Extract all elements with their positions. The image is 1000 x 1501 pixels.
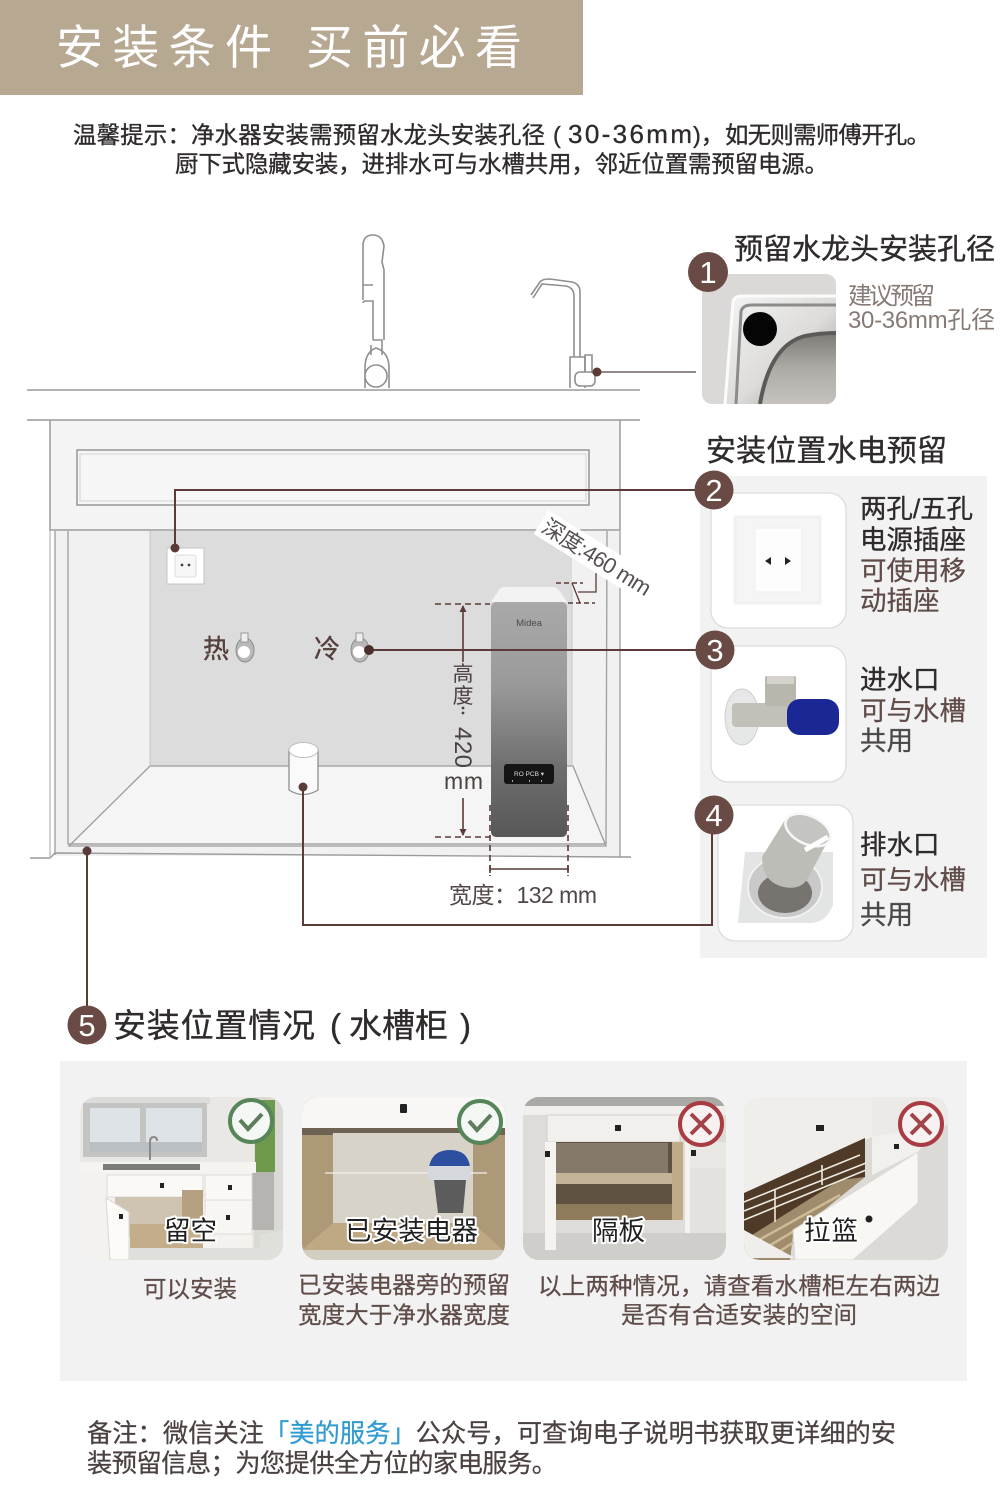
text: power socket: 两孔/五孔 (860, 494, 973, 524)
title banner: 买前必看 (306, 21, 522, 74)
photo: empty cabinet: 留空 (164, 1216, 217, 1246)
heading: cabinet situation (68, 1006, 471, 1044)
cold water valve: 冷 (314, 634, 340, 664)
heading: water and power: 安装位置水电预留 (706, 435, 947, 468)
cabinet fascia (50, 420, 620, 530)
photo: sink corner hole (702, 274, 836, 404)
text: floor drain: 排水口 (860, 830, 940, 860)
icon: check 1 (230, 1100, 272, 1142)
photo: shelf: 隔板 (592, 1216, 645, 1246)
callout line 1 (592, 368, 696, 376)
badge 1: 1 (699, 255, 717, 290)
panel: cabinet cases (60, 1061, 967, 1381)
heading: cabinet situation: ) (460, 1007, 471, 1044)
callout text: faucet hole (848, 283, 995, 334)
text: inlet valve: 可与水槽 (860, 696, 966, 726)
water purifier (491, 587, 567, 837)
depth dimension: 深度:460 mm (538, 514, 656, 601)
card: floor drain (718, 805, 853, 941)
caption: installed appliance: 已安装电器旁的预留 (298, 1272, 510, 1298)
photo: pull basket (744, 1097, 948, 1260)
heading: cabinet situation: ( (330, 1007, 341, 1044)
tip text (73, 119, 930, 177)
height dimension (435, 604, 490, 837)
icon: cross 2 (900, 1103, 942, 1145)
height dimension: 度 (452, 685, 474, 708)
badge 2: 2 (705, 473, 723, 508)
badge 4 (694, 796, 734, 834)
cold water valve (314, 633, 369, 664)
height dimension: mm (444, 768, 483, 794)
drain pipe (289, 742, 318, 794)
heading: faucet hole: 预留水龙头安装孔径 (734, 233, 995, 266)
card: inlet valve (711, 646, 846, 782)
card: power socket (711, 493, 846, 628)
callout line 3 (364, 645, 700, 655)
callout line 4 (298, 782, 712, 925)
width dimension (449, 805, 597, 908)
photo: shelf (523, 1097, 726, 1260)
text: power socket: 电源插座 (860, 525, 966, 555)
text: inlet valve: 共用 (860, 726, 913, 756)
tip text: 30-36mm (568, 119, 692, 149)
caption: shelf and basket: 以上两种情况，请查看水槽柜左右两边 (538, 1273, 940, 1299)
callout text: faucet hole: 30-36mm孔径 (848, 307, 995, 334)
text: power socket (860, 494, 973, 616)
photo: empty cabinet (80, 1097, 283, 1260)
footer note (87, 1420, 896, 1478)
cabinet interior (30, 531, 631, 858)
callout line 2 (170, 490, 700, 552)
sink cabinet diagram (27, 235, 660, 908)
wall socket (167, 548, 204, 584)
footer note: 装预留信息；为您提供全方位的家电服务。 (87, 1450, 557, 1478)
text: floor drain: 共用 (860, 900, 913, 930)
footer note: 备注：微信关注「美的服务」公众号，可查询电子说明书获取更详细的安 (87, 1420, 896, 1448)
tip text: ( (553, 122, 561, 148)
water purifier: Midea (516, 618, 543, 629)
panel: water and power (700, 476, 987, 958)
panel: faucet hole (702, 233, 995, 404)
caption: shelf and basket: 是否有合适安装的空间 (621, 1302, 857, 1328)
text: inlet valve: 进水口 (860, 665, 940, 695)
caption: shelf and basket (538, 1273, 940, 1328)
height dimension: 高 (452, 663, 474, 686)
hot water valve: 热 (203, 634, 229, 664)
purifier faucet (531, 279, 595, 388)
photo: installed appliance: 已安装电器 (345, 1216, 478, 1246)
height dimension: 420 (449, 727, 476, 768)
caption: installed appliance: 宽度大于净水器宽度 (298, 1302, 510, 1328)
text: power socket: 可使用移 (860, 556, 966, 586)
badge 3 (696, 630, 734, 670)
icon: cross 1 (680, 1103, 722, 1145)
text: floor drain: 可与水槽 (860, 865, 966, 895)
title banner (0, 0, 583, 95)
callout line 5 (82, 846, 92, 1008)
badge 3: 3 (706, 633, 724, 668)
tip text: 温馨提示：净水器安装需预留水龙头安装孔径 (73, 122, 545, 148)
heading: cabinet situation: 5 (78, 1008, 96, 1043)
text: floor drain (860, 830, 966, 930)
badge 2 (694, 470, 734, 510)
text: power socket: 动插座 (860, 586, 940, 616)
badge 1 (688, 252, 728, 292)
photo: installed appliance (302, 1097, 505, 1260)
caption: empty cabinet: 可以安装 (143, 1276, 237, 1302)
width dimension: 宽度：132 mm (449, 882, 597, 908)
heading: cabinet situation: 安装位置情况 (113, 1007, 315, 1044)
counter top lines (27, 390, 640, 530)
kitchen faucet (363, 235, 389, 388)
icon: check 2 (459, 1101, 501, 1143)
caption: installed appliance (298, 1272, 510, 1328)
heading: cabinet situation: 水槽柜 (349, 1007, 448, 1044)
text: inlet valve (860, 665, 966, 756)
title banner: 安装条件 (56, 21, 272, 74)
hot water valve (203, 633, 254, 664)
tip text: )， (693, 122, 724, 148)
photo: pull basket: 拉篮 (804, 1216, 858, 1246)
tip text: 厨下式隐藏安装，进排水可与水槽共用，邻近位置需预留电源。 (175, 151, 828, 177)
callout text: faucet hole: 建议预留 (848, 283, 935, 310)
badge 4: 4 (705, 798, 723, 833)
tip text: 如无则需师傅开孔。 (725, 122, 930, 148)
water purifier: RO PCB ▾ (514, 771, 545, 778)
